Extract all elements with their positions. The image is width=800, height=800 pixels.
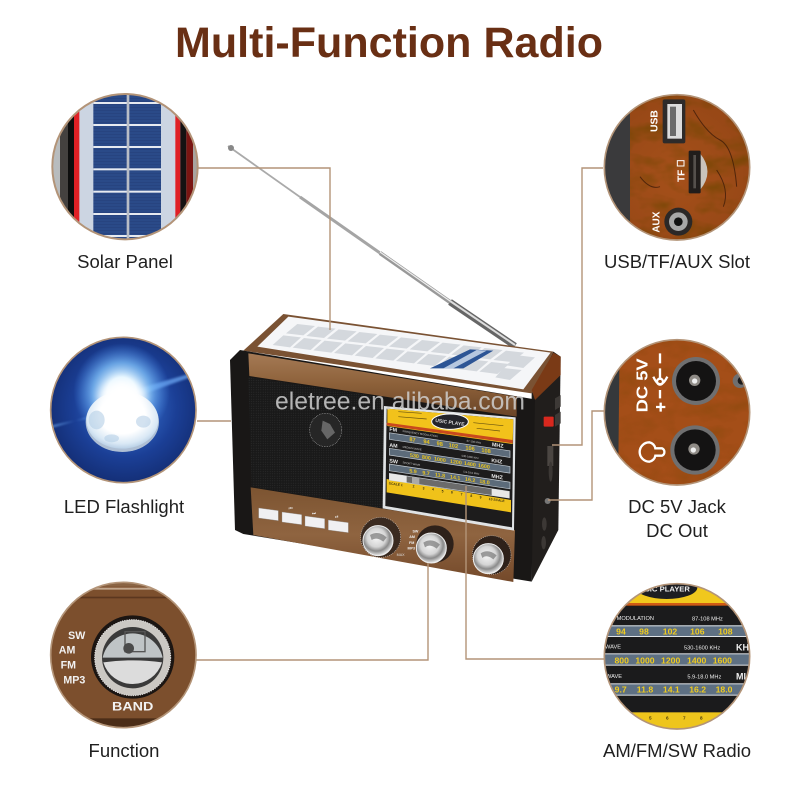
circle: band function knob: FM bbox=[61, 659, 76, 671]
tuning dial: 9 bbox=[480, 495, 482, 499]
label: function: Function bbox=[89, 740, 159, 761]
circle: AM FM SW tuning scale: WAVE bbox=[605, 645, 621, 651]
circle: AM FM SW tuning scale: 16.2 bbox=[689, 684, 706, 694]
circle: AM FM SW tuning scale: MI bbox=[736, 672, 746, 682]
circle: USB TF AUX slot: TF bbox=[677, 170, 688, 182]
label: DC jack bbox=[628, 496, 727, 541]
circle: band function knob: AM bbox=[59, 645, 75, 657]
tuning dial: 98 bbox=[437, 441, 443, 448]
circle: AM FM SW tuning scale: 1200 bbox=[661, 655, 680, 665]
tuning dial: 1400 bbox=[464, 461, 476, 469]
circle: AM FM SW tuning scale: 5 bbox=[649, 716, 652, 721]
tuning dial: 10 SCALE bbox=[489, 497, 506, 503]
tuning dial: 106 bbox=[465, 445, 475, 453]
tuning dial: KHZ bbox=[491, 458, 503, 466]
circle: AM FM SW tuning scale: 7 bbox=[683, 716, 686, 721]
circle: AM FM SW tuning scale: 14.1 bbox=[663, 684, 680, 694]
label: AM FM SW radio: AM/FM/SW Radio bbox=[603, 740, 751, 761]
circle: AM FM SW tuning scale: 1600 bbox=[713, 655, 732, 665]
tuning dial: 102 bbox=[449, 443, 458, 450]
watermark: eletree.en.alibaba.com bbox=[275, 387, 525, 415]
tuning dial: SCALE 1 bbox=[389, 481, 403, 487]
radio right side bbox=[532, 352, 561, 582]
tuning dial: 18.0 bbox=[479, 479, 490, 486]
circle: AM FM SW tuning scale: 18.0 bbox=[716, 684, 733, 694]
circle: AM FM SW tuning scale: 87-108 MHz bbox=[692, 617, 723, 623]
tuning dial: 800 bbox=[422, 455, 431, 462]
tuning dial: 87-108 MHz bbox=[467, 439, 482, 445]
circle: AM FM SW tuning scale bbox=[604, 582, 750, 730]
tuning dial: 11.8 bbox=[435, 472, 445, 480]
tuning dial: SW bbox=[389, 458, 399, 466]
volume knob: MAX bbox=[397, 553, 405, 557]
tuning dial: 8 bbox=[470, 494, 472, 498]
circle: AM FM SW tuning scale: 98 bbox=[639, 626, 649, 636]
circle: AM FM SW tuning scale: 1000 bbox=[635, 655, 655, 665]
circle: band function knob: SW bbox=[68, 630, 86, 642]
control buttons: ⏮ bbox=[289, 506, 293, 511]
circle: AM FM SW tuning scale: 11.8 bbox=[637, 684, 653, 694]
tuning dial: 1600 bbox=[478, 463, 490, 471]
circle: USB TF AUX slot: AUX bbox=[651, 211, 662, 233]
label: LED flashlight: LED Flashlight bbox=[64, 496, 184, 517]
tuning dial: AM bbox=[389, 443, 398, 450]
label: USB TF AUX slot: USB/TF/AUX Slot bbox=[604, 251, 750, 272]
radio bbox=[230, 314, 561, 582]
circle: AM FM SW tuning scale: 102 bbox=[663, 626, 677, 636]
speaker grille bbox=[248, 377, 384, 508]
tuning dial: FREQUENCY MODULATION bbox=[403, 429, 438, 438]
tuning dial: 530-1600 KHz bbox=[462, 454, 479, 460]
band knob: FM bbox=[409, 541, 414, 545]
circle: DC jack bbox=[604, 338, 750, 486]
circle: USB TF AUX slot bbox=[604, 94, 750, 241]
tuning dial bbox=[383, 406, 516, 531]
circle: DC jack: DC 5V bbox=[634, 357, 651, 412]
circle: AM FM SW tuning scale: 108 bbox=[718, 626, 733, 636]
circle: AM FM SW tuning scale: 1400 bbox=[687, 655, 706, 665]
circle: AM FM SW tuning scale: KH bbox=[736, 642, 749, 652]
tuning dial: 14.1 bbox=[450, 475, 460, 482]
circle: USB TF AUX slot: USB bbox=[650, 110, 661, 132]
tuning dial: 1000 bbox=[434, 456, 446, 464]
title: Multi-Function Radio bbox=[175, 19, 603, 67]
tuning dial: 5.9-18.0 MHz bbox=[463, 470, 480, 476]
control buttons bbox=[259, 506, 348, 533]
circle: band function knob: BAND bbox=[112, 699, 154, 713]
label: DC jack: DC Out bbox=[646, 520, 708, 541]
tuning dial: 530 bbox=[410, 453, 419, 460]
control buttons: ⏭ bbox=[312, 510, 316, 515]
tuning dial: MHZ bbox=[492, 442, 504, 450]
volume knob bbox=[361, 517, 405, 557]
tuning dial: 6 bbox=[451, 491, 453, 495]
tuning dial: MEDIUM WAVE bbox=[403, 445, 422, 452]
radio front body bbox=[230, 350, 535, 582]
circle: AM FM SW tuning scale: 5.9-18.0 MHz bbox=[687, 675, 721, 681]
tuning dial: 94 bbox=[423, 439, 430, 446]
circle: AM FM SW tuning scale: 106 bbox=[690, 626, 705, 636]
tuning dial: 9.7 bbox=[422, 470, 430, 477]
tuning dial: 3 bbox=[423, 486, 425, 490]
circle: AM FM SW tuning scale: 6 bbox=[666, 716, 669, 721]
antenna bbox=[228, 145, 515, 346]
tuning dial: 4 bbox=[432, 488, 434, 492]
tuning dial: 87 bbox=[409, 437, 416, 444]
radio top with solar panel bbox=[243, 314, 553, 393]
control buttons: ⏯ bbox=[335, 514, 338, 519]
tuning dial: 1200 bbox=[450, 459, 462, 467]
tuning dial: MHZ bbox=[491, 474, 504, 482]
tuning dial: FM bbox=[389, 427, 398, 434]
band knob: AM bbox=[409, 535, 415, 539]
circle: band function knob bbox=[50, 582, 197, 728]
label: solar panel: Solar Panel bbox=[77, 251, 173, 272]
circle: AM FM SW tuning scale: 800 bbox=[614, 655, 629, 665]
circle: solar panel bbox=[51, 93, 199, 240]
band knob: MP3 bbox=[407, 546, 415, 550]
circle: AM FM SW tuning scale: SIC PLAYER bbox=[645, 585, 690, 594]
circle: AM FM SW tuning scale: 9.7 bbox=[615, 684, 627, 694]
tuning dial: 7 bbox=[461, 492, 463, 496]
tuning dial: USIC PLAYE bbox=[435, 418, 465, 428]
tuning dial: 5 bbox=[442, 489, 444, 493]
tuning dial: 108 bbox=[481, 448, 491, 455]
circle: LED flashlight bbox=[50, 336, 197, 484]
label: DC jack: DC 5V Jack bbox=[628, 496, 727, 517]
circle: AM FM SW tuning scale: MODULATION bbox=[617, 616, 654, 622]
circle: AM FM SW tuning scale: 94 bbox=[616, 626, 626, 636]
tuning knob bbox=[472, 536, 511, 574]
tuning dial: 2 bbox=[413, 485, 415, 489]
circle: AM FM SW tuning scale: WAVE bbox=[606, 674, 622, 680]
leader lines bbox=[196, 168, 604, 660]
tuning dial: 5.9 bbox=[409, 468, 417, 476]
band knob: SW bbox=[412, 530, 419, 534]
circle: AM FM SW tuning scale: 530-1600 KHz bbox=[684, 646, 720, 652]
circle: AM FM SW tuning scale: 8 bbox=[700, 716, 703, 721]
circle: band function knob: MP3 bbox=[63, 674, 85, 686]
tuning dial: 16.2 bbox=[465, 477, 475, 484]
band knob bbox=[407, 525, 454, 563]
tuning dial: SHORT WAVE bbox=[403, 460, 420, 467]
